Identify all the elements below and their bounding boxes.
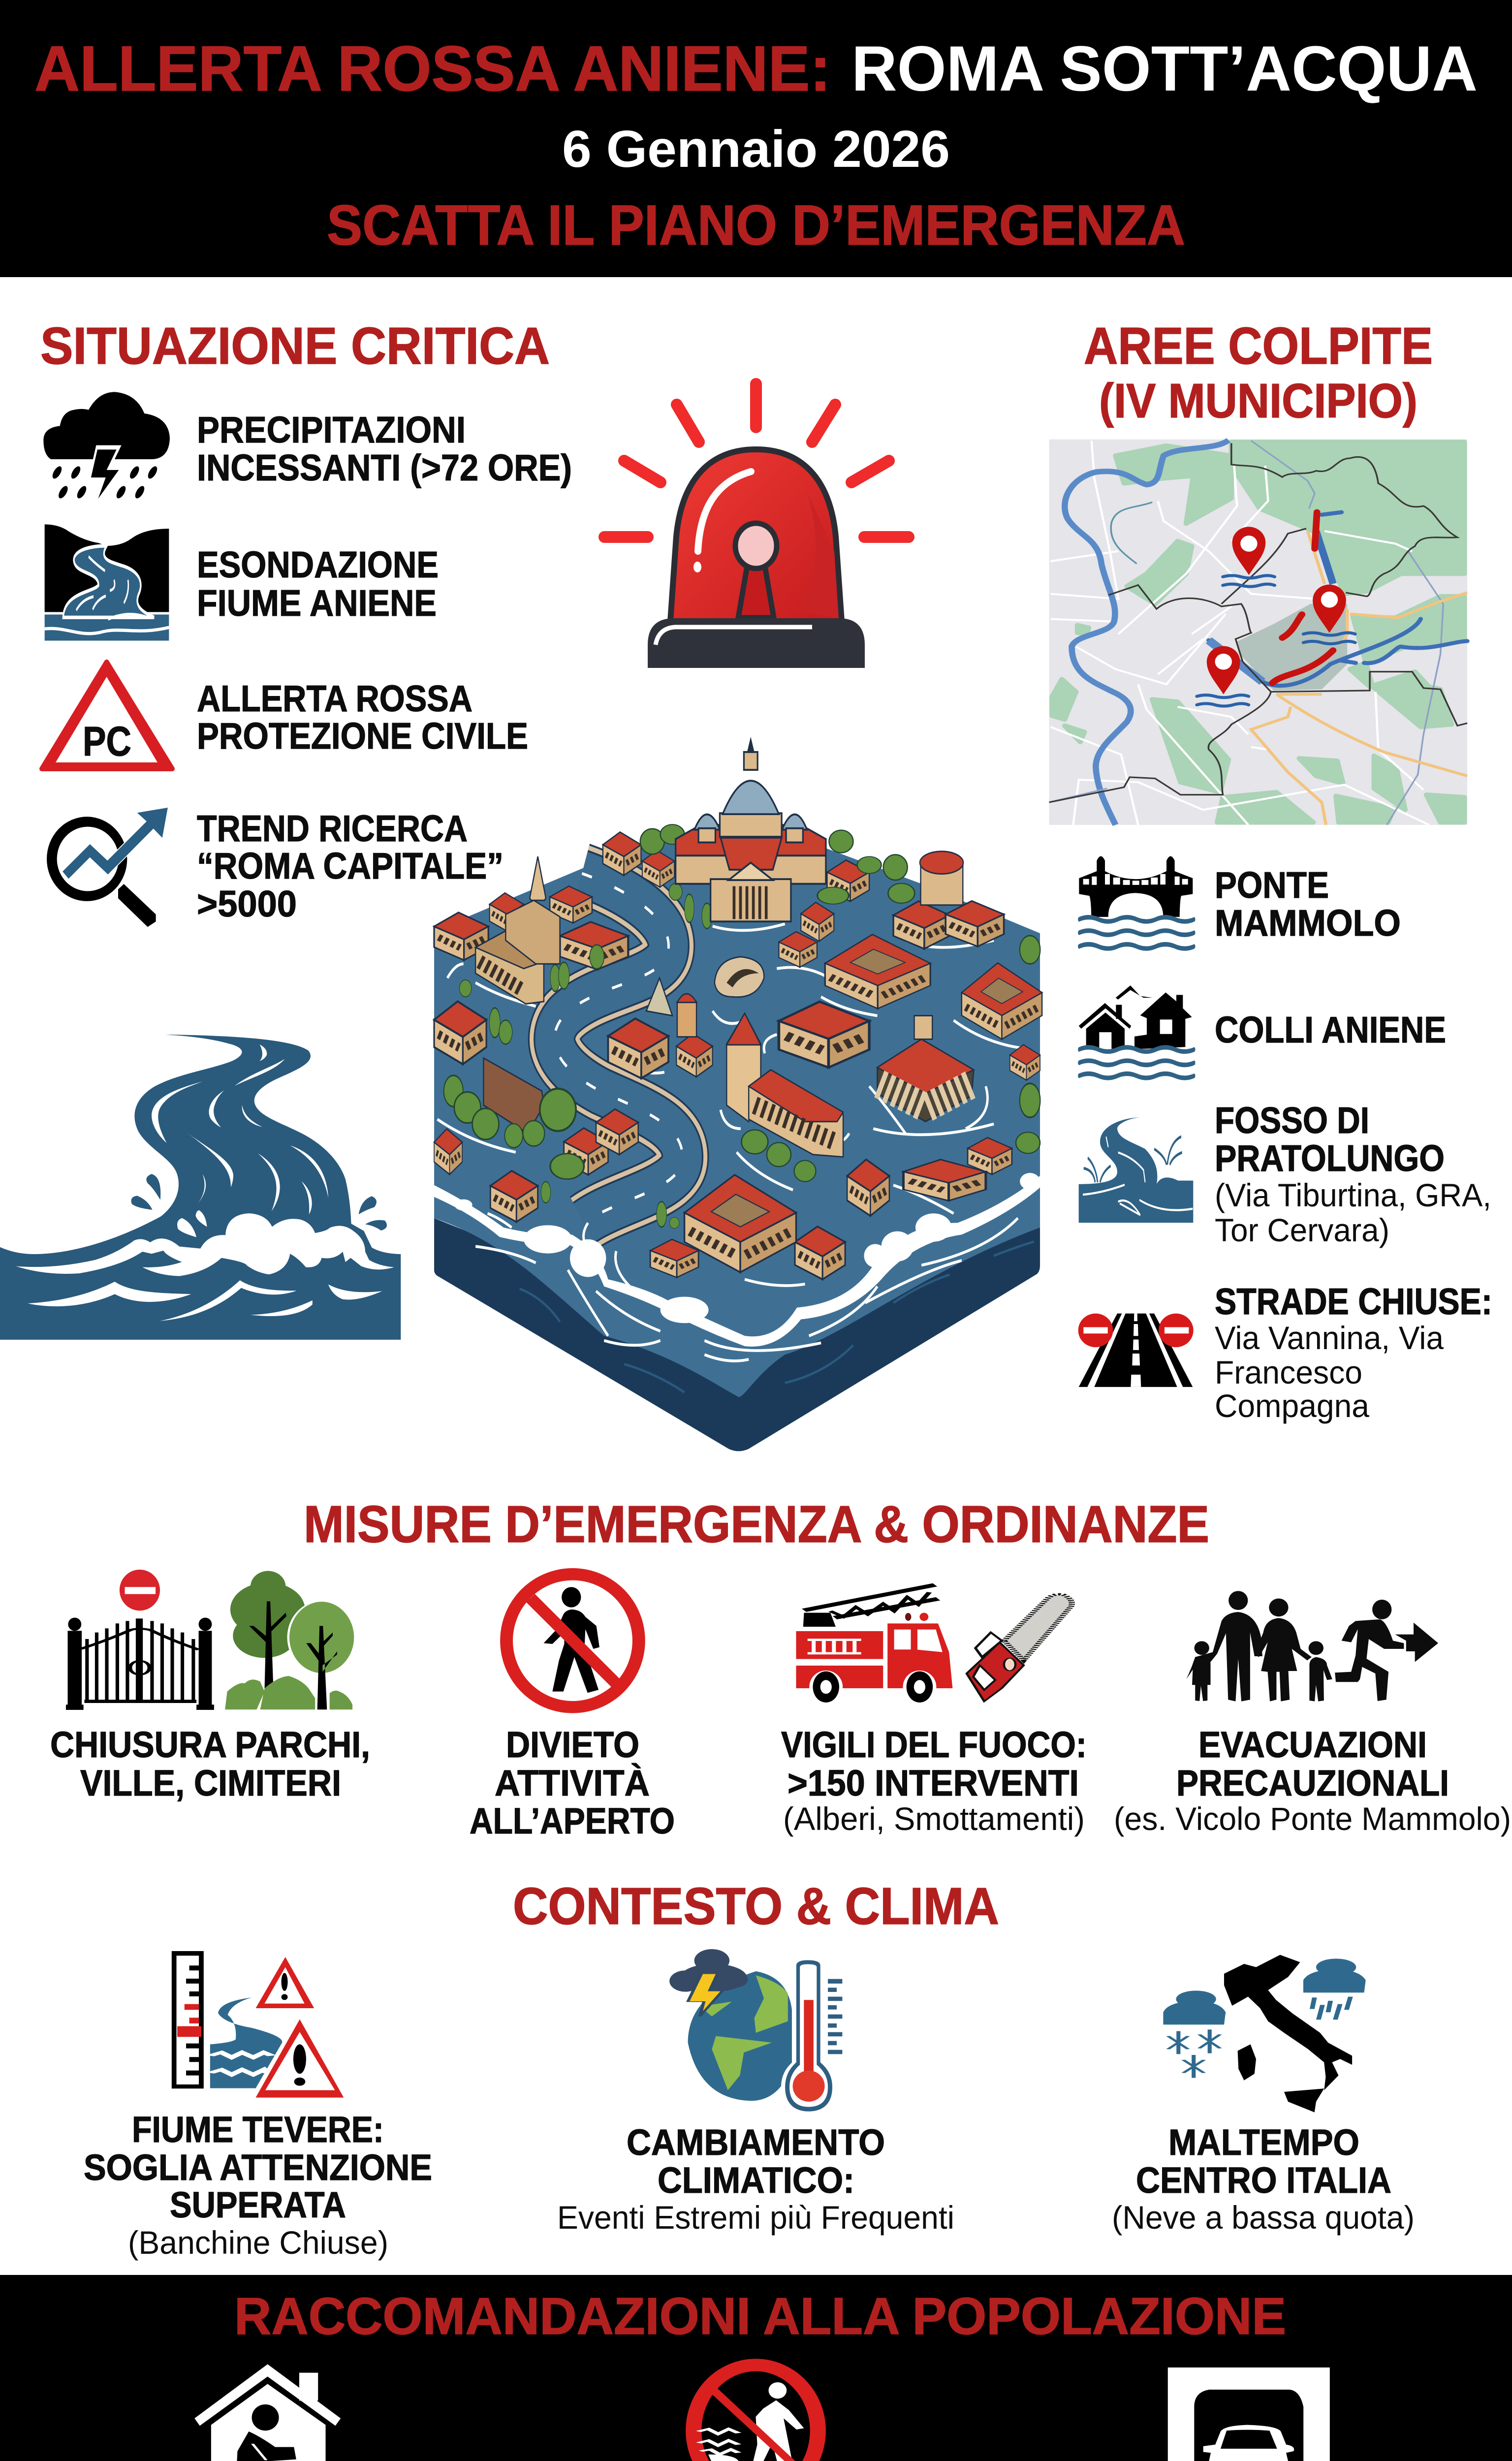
date: 6 Gennaio 2026 [562,120,950,178]
text: vigili del fuoco: >150 INTERVENTI [788,1763,1079,1803]
text: strade chiuse [1215,1281,1492,1424]
text: precipitazioni: INCESSANTI (>72 ORE) [197,447,572,488]
title red part: ALLERTA ROSSA ANIENE: [34,32,831,104]
water surface [434,818,1040,1397]
text: esondazione: FIUME ANIENE [197,582,437,624]
text: trend ricerca: TREND RICERCA [197,808,468,849]
icon: search trend [47,807,168,927]
text: cambiamento climatico: CLIMATICO: [658,2160,854,2201]
heading: aree colpite [1084,317,1433,428]
icon: ponte mammolo [1079,856,1194,948]
heading: situazione critica: SITUAZIONE CRITICA [40,317,550,375]
text: allerta rossa: ALLERTA ROSSA [197,678,472,719]
icon: colli aniene [1079,985,1194,1078]
text: chiusura parchi: CHIUSURA PARCHI, [50,1724,370,1765]
text: trend ricerca [197,808,504,924]
title white part: ROMA SOTT’ACQUA [851,32,1478,104]
city base [434,1218,1040,1451]
text: strade chiuse: Via Vannina, Via [1215,1320,1444,1356]
text: divieto attivita [470,1724,675,1841]
text: divieto attivita: DIVIETO [506,1724,639,1765]
heading: raccomandazioni: RACCOMANDAZIONI ALLA POPOLAZIONE [234,2287,1286,2345]
icon: globe and thermometer [669,1949,842,2112]
text: fosso di pratolungo [1215,1100,1491,1248]
icon: closed gate and trees [66,1570,355,1710]
heading: aree colpite: (IV MUNICIPIO) [1099,374,1418,428]
icon: fosso di pratolungo [1079,1117,1193,1223]
text: allerta rossa [197,678,528,757]
text: fosso di pratolungo: Tor Cervara) [1215,1212,1389,1248]
text: trend ricerca: “ROMA CAPITALE” [197,845,504,886]
text: colli aniene: COLLI ANIENE [1215,1009,1446,1050]
map: IV municipio [1049,440,1467,825]
text: vigili del fuoco [781,1724,1087,1837]
text: evacuazioni: (es. Vicolo Ponte Mammolo) [1114,1800,1511,1837]
text: strade chiuse: Francesco [1215,1354,1362,1390]
text: evacuazioni [1114,1724,1511,1837]
illustration: big wave [0,1035,401,1340]
text: fosso di pratolungo: PRATOLUNGO [1215,1137,1445,1179]
text: fiume tevere: SOGLIA ATTENZIONE [84,2147,432,2188]
illustration: flooded Rome city [434,740,1042,1451]
text: cambiamento climatico: CAMBIAMENTO [627,2122,885,2163]
text: fiume tevere [84,2109,432,2261]
text: precipitazioni [197,409,572,488]
text: maltempo: MALTEMPO [1168,2122,1359,2163]
text: chiusura parchi: VILLE, CIMITERI [80,1763,341,1803]
text: fosso di pratolungo: (Via Tiburtina, GRA, [1215,1177,1491,1213]
text: trend ricerca: >5000 [197,883,297,924]
icon: underpass [1168,2367,1330,2461]
text: fiume tevere: FIUME TEVERE: [132,2109,384,2150]
text: precipitazioni: PRECIPITAZIONI [197,409,466,450]
text: ponte mammolo: MAMMOLO [1215,902,1401,944]
river [555,874,683,1223]
text: strade chiuse: Compagna [1215,1388,1369,1424]
foam [434,1173,1040,1347]
panel: raccomandazioni [0,2275,1512,2461]
text: vigili del fuoco: (Alberi, Smottamenti) [783,1800,1085,1837]
text: fosso di pratolungo: FOSSO DI [1215,1100,1369,1141]
text: evacuazioni: EVACUAZIONI [1198,1724,1427,1765]
buildings [434,824,1042,1279]
text: maltempo: (Neve a bassa quota) [1112,2199,1415,2236]
icon: warning triangle PC [42,662,172,769]
heading: aree colpite: AREE COLPITE [1084,317,1433,375]
icon: storm cloud [43,392,170,507]
icon: stay home [194,2364,341,2461]
icon: evacuating family [1186,1591,1438,1702]
text: divieto attivita: ATTIVITÀ [495,1763,650,1803]
text: maltempo: CENTRO ITALIA [1136,2160,1391,2201]
icon: red siren [604,384,909,668]
icon: no river banks [686,2359,826,2461]
basilica [676,740,826,921]
text: fiume tevere: (Banchine Chiuse) [128,2224,388,2261]
text: allerta rossa: PROTEZIONE CIVILE [197,715,528,757]
heading: contesto e clima: CONTESTO & CLIMA [513,1877,999,1935]
text: fiume tevere: SUPERATA [170,2184,346,2225]
icon: tevere gauge and warnings [172,1951,344,2098]
text: cambiamento climatico: Eventi Estremi più Frequenti [557,2199,954,2236]
text: esondazione [197,544,439,624]
icon: no pedestrians [500,1568,645,1713]
text: ponte mammolo [1215,864,1401,944]
text: maltempo [1112,2122,1415,2236]
icon: warning triangle PC: PC [83,718,131,764]
text: ponte mammolo: PONTE [1215,864,1329,906]
icon: river overflow [45,524,169,641]
text: divieto attivita: ALL’APERTO [470,1800,675,1841]
icon: italy with snow and rain [1163,1955,1366,2113]
icon: strade chiuse [1078,1314,1194,1387]
icon: fire truck and chainsaw [796,1585,1072,1704]
panel: header [0,0,1512,277]
text: cambiamento climatico [557,2122,954,2236]
text: esondazione: ESONDAZIONE [197,544,439,585]
ruin and trees [483,1058,544,1134]
text: evacuazioni: PRECAUZIONALI [1176,1763,1449,1803]
subtitle: SCATTA IL PIANO D’EMERGENZA [327,194,1185,257]
text: vigili del fuoco: VIGILI DEL FUOCO: [781,1724,1087,1765]
text: chiusura parchi [50,1724,370,1803]
heading: misure d'emergenza: MISURE D’EMERGENZA & ORDINANZE [304,1495,1209,1553]
